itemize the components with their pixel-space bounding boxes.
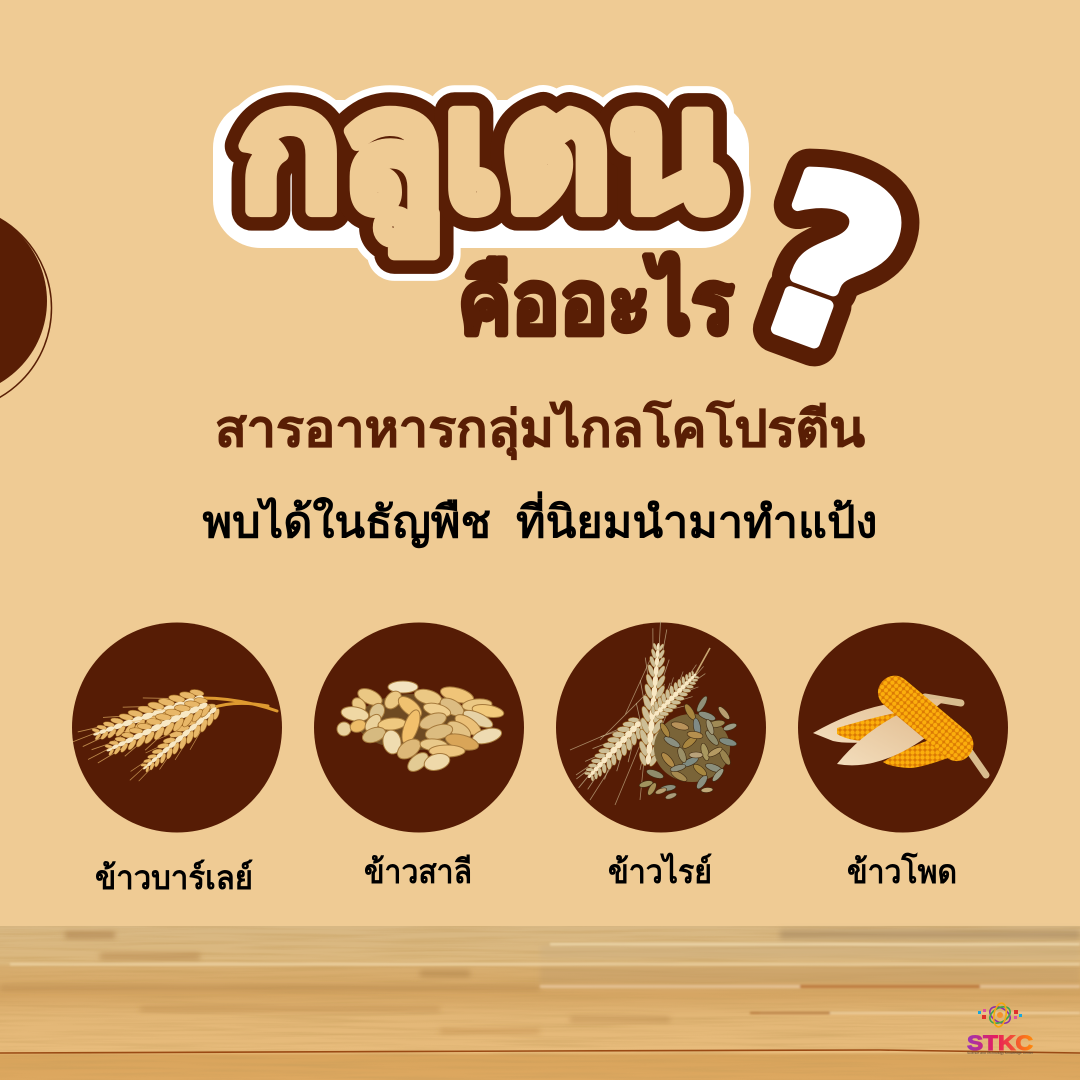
illustration: wheat ears xyxy=(67,678,277,792)
label: oats: ข้าวสาลี xyxy=(364,853,472,890)
panel: oats xyxy=(314,622,524,832)
illustration: rye ears xyxy=(565,619,714,805)
decorative half circle at left edge xyxy=(0,205,52,411)
title: กลูเตน: กลูเตน xyxy=(239,59,725,254)
subtitle: สารอาหารกลุ่มไกลโคโปรตีน xyxy=(215,399,865,460)
panel: rye xyxy=(556,619,766,832)
icon: question mark: ? xyxy=(722,120,935,411)
logo wordmark: STKC xyxy=(967,1032,1033,1055)
icon: atom xyxy=(978,1002,1022,1028)
panel: barley xyxy=(67,622,282,832)
panel: corn xyxy=(798,622,1008,832)
illustration: corn cobs xyxy=(813,669,986,775)
illustration: rye grains xyxy=(638,695,738,800)
title: คืออะไร: คืออะไร xyxy=(458,253,734,352)
label: rye: ข้าวไรย์ xyxy=(608,852,712,890)
logo: STKC xyxy=(967,1002,1034,1055)
label: barley: ข้าวบาร์เลย์ xyxy=(95,859,253,896)
description: พบได้ในธัญพืช ที่นิยมนำมาทำแป้ง xyxy=(202,491,877,548)
label: corn: ข้าวโพด xyxy=(847,852,957,890)
illustration: oat grains xyxy=(337,681,505,775)
title: กลูเตน: กลูเตน xyxy=(239,59,725,254)
wood floor xyxy=(0,926,1080,1080)
logo tagline: Science and Technology Knowledge Center xyxy=(967,1050,1034,1055)
icon: question mark: ? xyxy=(722,120,935,411)
title: กลูเตน: กลูเตน xyxy=(239,59,725,254)
